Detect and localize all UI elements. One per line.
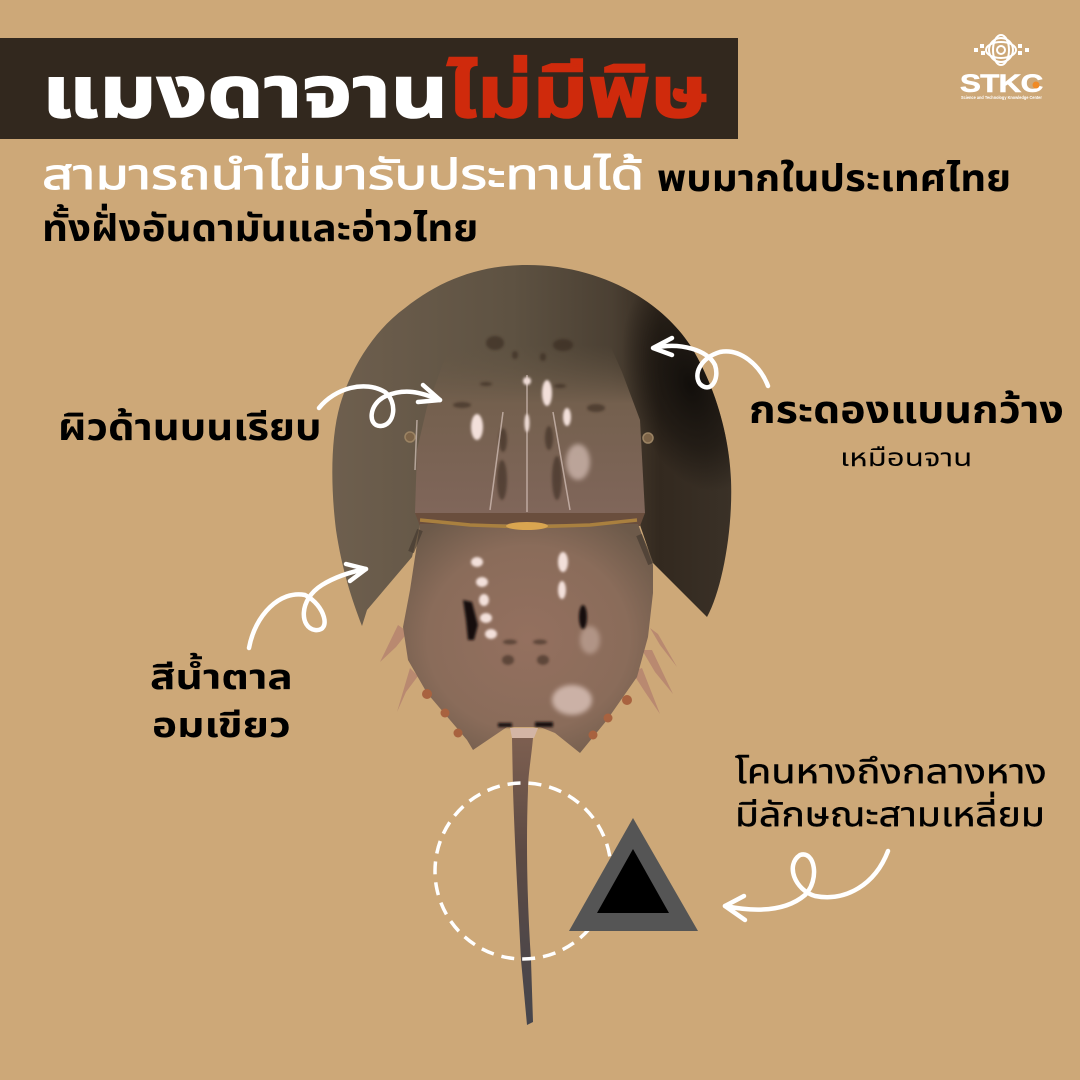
abdomen side bands [411, 530, 651, 564]
tail base plate [510, 728, 538, 738]
dashed circle [435, 783, 611, 959]
title text white: แมงดาจาน [42, 53, 448, 133]
tail [512, 738, 533, 1025]
subtitle black line 1: พบมากในประเทศไทย [657, 158, 1011, 199]
label heading: กระดองแบนกว้าง [749, 390, 1064, 432]
eyes [405, 432, 653, 443]
telson spikes [380, 625, 677, 714]
label: wide shell [749, 390, 1064, 472]
label: brown colour line 2: อมเขียว [152, 706, 291, 745]
triangle icon [569, 818, 698, 931]
highlights and markings [471, 377, 571, 639]
label: tail shape line 1: โคนหางถึงกลางหาง [735, 753, 1047, 791]
logo: STKC: Science and Technology Knowledge Center [961, 95, 1042, 100]
label: tail shape line 2: มีลักษณะสามเหลี่ยม [735, 796, 1045, 834]
arrow: wide shell [653, 338, 768, 387]
hinge band [415, 513, 645, 526]
arrow: smooth surface [319, 385, 440, 426]
horseshoe crab illustration [246, 265, 890, 1025]
subtitle black line 2: ทั้งฝั่งอันดามันและอ่าวไทย [42, 208, 478, 249]
logo: STKC [960, 34, 1043, 100]
edge spines [422, 689, 632, 740]
title text red: ไม่มีพิษ [447, 53, 709, 133]
arrow: triangle tail [725, 851, 888, 920]
central shield [415, 345, 645, 513]
hinge line [420, 520, 637, 527]
title banner [0, 38, 738, 139]
label: brown colour line 1: สีน้ำตาล [150, 658, 293, 697]
logo: STKC: STKC [960, 70, 1043, 98]
subtitle white: สามารถนำไข่มารับประทานได้ [42, 151, 644, 198]
label: smooth surface: ผิวด้านบนเรียบ [58, 407, 322, 448]
abdomen [403, 524, 653, 753]
carapace [332, 265, 732, 626]
arrow: brown colour [249, 564, 366, 648]
label sub: เหมือนจาน [840, 444, 972, 472]
